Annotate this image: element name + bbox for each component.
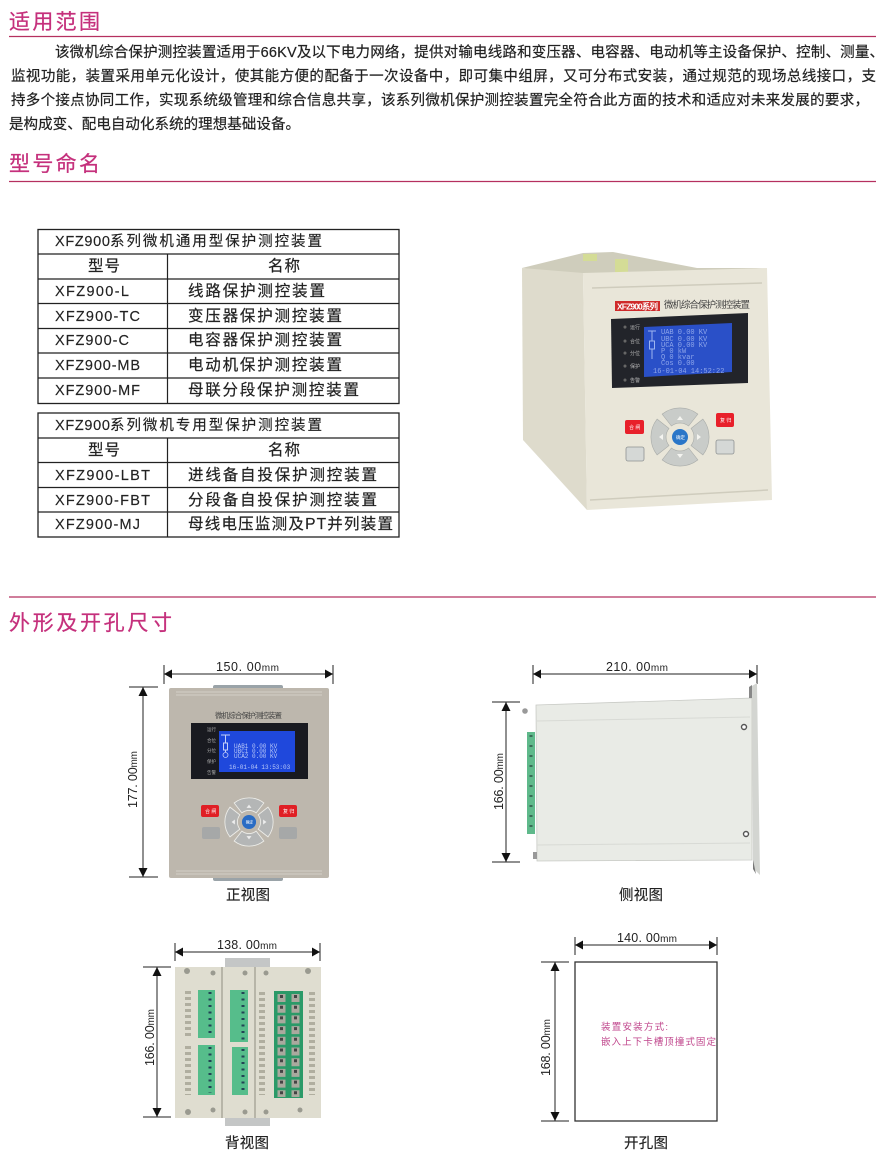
- table: general-purpose models: 电动机保护测控装置: [188, 356, 342, 374]
- LCD screen: UAB 0.00 KV: [661, 329, 708, 337]
- text block: scope description: [9, 43, 884, 133]
- width dimension 140.00mm: [575, 931, 717, 955]
- section: scope of application: [9, 11, 884, 133]
- LCD: UBC1 0.00 KV: [234, 748, 278, 755]
- table: general-purpose models: 系列微机通用型保护测控装置: [110, 233, 322, 250]
- LCD screen: P 0 kW: [661, 348, 687, 356]
- table: general-purpose models: 名称: [268, 257, 300, 275]
- device side photo: [522, 683, 760, 875]
- caption: 背视图: 背视图: [225, 1135, 269, 1152]
- table: dedicated models: XFZ900-MJ: [55, 517, 140, 533]
- caption: 开孔图: 开孔图: [624, 1135, 668, 1152]
- brand badge: XFZ900系列: [617, 302, 658, 312]
- caption: 正视图: 正视图: [226, 887, 270, 904]
- device back photo: [175, 958, 321, 1126]
- heading: 外形及开孔尺寸: 外形及开孔尺寸: [9, 612, 172, 635]
- LCD screen: UBC 0.00 KV: [661, 336, 708, 344]
- device front photo: [169, 685, 329, 881]
- table: general-purpose models: XFZ900-MF: [55, 383, 140, 399]
- text block: scope description: 持多个接点协同工作，实现系统级管理和综合信息共享，该系列微机保护测控装置完全符合此方面的技术和适应对未来发展的要求，: [11, 91, 869, 109]
- status labels: 合位: [630, 338, 640, 345]
- note: installation method: 嵌入上下卡槽顶撞式固定: [601, 1036, 716, 1048]
- table: general-purpose models: 母联分段保护测控装置: [188, 381, 359, 399]
- table: general-purpose models: XFZ900-C: [55, 333, 129, 349]
- table: dedicated models: [38, 413, 399, 537]
- table: dedicated models: 进线备自投保护测控装置: [188, 466, 377, 484]
- red and grey buttons: 合 闸: [629, 424, 640, 431]
- table: general-purpose models: 变压器保护测控装置: [188, 307, 342, 325]
- large terminal block: [274, 991, 303, 1098]
- status labels: 分位: [630, 350, 640, 357]
- LCD screen: Cos 0.00: [661, 360, 695, 368]
- width dimension 150.00mm: 150. 00mm: [216, 660, 279, 674]
- figure: cut-out: [539, 931, 717, 1152]
- height dimension 168.00mm: [539, 962, 569, 1121]
- keypad: 确定: [246, 820, 253, 825]
- height dimension 166.00mm: [143, 967, 171, 1117]
- figure: front view: [126, 660, 333, 904]
- width dimension 210.00mm: 210. 00mm: [606, 660, 668, 674]
- width dimension 138.00mm: 138. 00mm: [217, 938, 277, 952]
- table: general-purpose models: XFZ900: [55, 234, 110, 250]
- table: general-purpose models: XFZ900-L: [55, 284, 129, 300]
- table: dedicated models: 母线电压监测及PT并列装置: [188, 515, 393, 533]
- LCD: [191, 723, 308, 779]
- LCD screen: [644, 323, 732, 377]
- LCD: 16-01-04 13:53:03: [229, 764, 291, 771]
- LCD screen: 16-01-04 14:52:22: [653, 368, 724, 376]
- table: dedicated models: 分段备自投保护测控装置: [188, 491, 377, 509]
- LCD: 分位: [207, 747, 216, 754]
- keypad: [225, 798, 273, 846]
- front panel: [583, 268, 772, 510]
- status labels: [625, 324, 640, 384]
- table: dedicated models: 型号: [88, 441, 120, 459]
- text block: scope description: 监视功能，装置采用单元化设计，使其能方便的配备于一次设备中，即可集中组屏，又可分布式安装，通过规范的现场总线接口，支: [11, 68, 876, 85]
- green terminal: [527, 732, 535, 834]
- LCD: UAB1 0.00 KV: [234, 743, 278, 750]
- table: general-purpose models: XFZ900-MB: [55, 358, 140, 374]
- top clips: [583, 254, 628, 273]
- red and grey buttons: [625, 413, 734, 461]
- buttons: [201, 805, 297, 839]
- LCD screen: Q 0 kvar: [661, 354, 695, 362]
- buttons: 合 闸: [205, 808, 216, 815]
- table: dedicated models: XFZ900: [55, 418, 110, 434]
- device title: 微机综合保护测控装置: [664, 299, 750, 311]
- figure: back view: [143, 938, 321, 1152]
- table: general-purpose models: XFZ900-TC: [55, 309, 140, 325]
- LCD: 告警: [207, 769, 216, 776]
- height dimension 166.00mm: [492, 702, 520, 862]
- LCD: 合位: [207, 737, 216, 744]
- cut-out outline: [575, 962, 717, 1121]
- width dimension 150.00mm: [164, 660, 333, 684]
- table: dedicated models: 名称: [268, 441, 300, 459]
- heading: 适用范围: 适用范围: [9, 11, 100, 34]
- LCD: UCA2 0.00 KV: [234, 753, 278, 760]
- note: installation method: [601, 1021, 716, 1048]
- caption: 侧视图: 侧视图: [619, 887, 663, 904]
- text block: scope description: 是构成变、配电自动化系统的理想基础设备。: [9, 116, 300, 133]
- keypad: 确定: [676, 434, 685, 441]
- table: general-purpose models: [38, 230, 399, 404]
- keypad: [651, 408, 709, 466]
- height dimension 168.00mm: 168. 00mm: [539, 1019, 553, 1076]
- status labels: 保护: [630, 363, 640, 370]
- table: general-purpose models: 型号: [88, 257, 120, 275]
- width dimension 138.00mm: [175, 938, 320, 961]
- status labels: 告警: [630, 377, 640, 384]
- top of case: [522, 252, 767, 276]
- heading: 型号命名: 型号命名: [9, 153, 100, 176]
- table: general-purpose models: 线路保护测控装置: [188, 282, 325, 300]
- green connectors: [198, 990, 248, 1095]
- note: installation method: 装置安装方式:: [601, 1021, 668, 1033]
- mounting screws: [184, 968, 311, 1115]
- screws: [522, 708, 748, 859]
- LCD screen: UCA 0.00 KV: [661, 342, 708, 350]
- section: model naming: [9, 153, 876, 537]
- section: dimensions: [9, 597, 876, 1152]
- table: general-purpose models: 电容器保护测控装置: [188, 331, 342, 349]
- table: dedicated models: 系列微机专用型保护测控装置: [110, 417, 322, 434]
- device title: 微机综合保护测控装置: [215, 710, 282, 720]
- buttons: 复 归: [283, 808, 294, 815]
- status labels: 运行: [630, 324, 640, 331]
- text block: scope description: 该微机综合保护测控装置适用于66KV及以下电力网络，提供对输电线路和变压器、电容器、电动机等主设备保护、控制、测量、: [55, 43, 884, 61]
- height dimension 166.00mm: 166. 00mm: [143, 1009, 157, 1066]
- product photo: device perspective view: [522, 252, 772, 510]
- figure: side view: [492, 660, 760, 904]
- width dimension 140.00mm: 140. 00mm: [617, 931, 677, 945]
- table: dedicated models: XFZ900-FBT: [55, 493, 150, 509]
- red and grey buttons: 复 归: [720, 417, 731, 424]
- height dimension 177.00mm: 177. 00mm: [126, 751, 140, 808]
- width dimension 210.00mm: [533, 660, 757, 684]
- LCD bezel: [611, 313, 748, 388]
- height dimension 177.00mm: [126, 687, 158, 877]
- LCD: 运行: [207, 726, 216, 733]
- table: dedicated models: XFZ900-LBT: [55, 468, 150, 484]
- LCD: 保护: [207, 758, 216, 765]
- wiring labels: [188, 991, 312, 1095]
- side of case: [522, 268, 587, 510]
- height dimension 166.00mm: 166. 00mm: [492, 753, 506, 810]
